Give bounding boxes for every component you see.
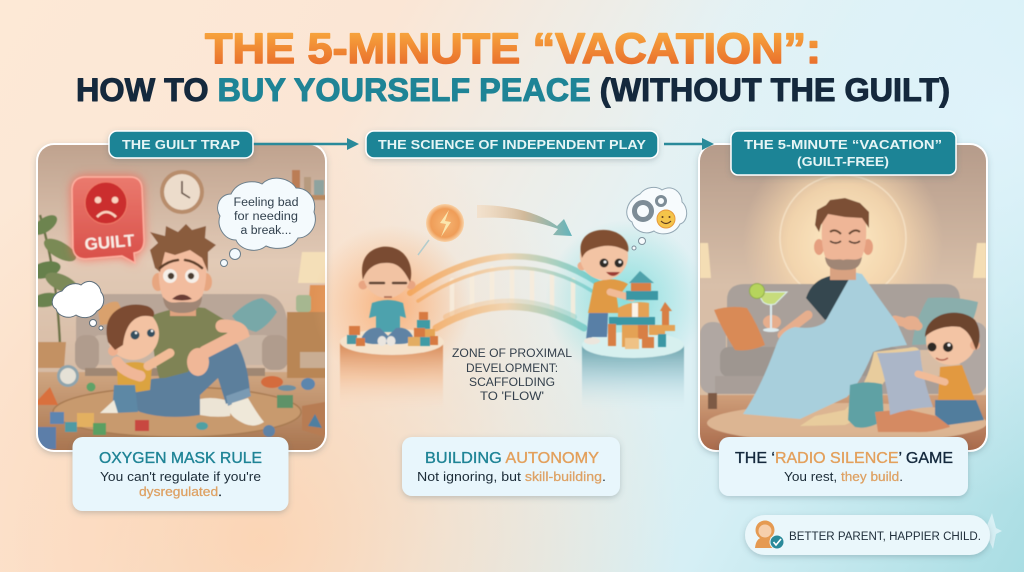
label: the 5-minute vacation — [731, 131, 956, 175]
thought bubble: dad: Feeling bad — [234, 197, 298, 209]
caption: building autonomy: Not ignoring, but skill-building . — [417, 469, 606, 484]
panel: guilt-free vacation — [698, 140, 988, 452]
plant — [38, 214, 76, 368]
zone of proximal development label: DEVELOPMENT: — [466, 363, 558, 375]
calm halo — [754, 176, 933, 284]
rug — [53, 387, 301, 437]
icon: wall clock — [160, 170, 204, 214]
footer badge: BETTER PARENT, HAPPIER CHILD. — [789, 531, 981, 543]
thought bubble: child — [52, 281, 104, 330]
footer badge — [745, 513, 1002, 555]
icon: parent with check — [755, 520, 784, 549]
caption: building autonomy: BUILDING AUTONOMY — [425, 450, 599, 467]
panel: the guilt trap — [27, 143, 327, 452]
caption: oxygen mask rule: You can't regulate if you're — [100, 469, 261, 484]
lamp and side table — [287, 252, 327, 378]
sad child with blocks — [347, 247, 438, 346]
sofa — [700, 284, 987, 409]
caption: building autonomy — [402, 437, 620, 496]
thought bubble: dad — [218, 178, 315, 266]
label: the 5-minute vacation: THE 5-MINUTE “VACATION” — [744, 137, 942, 152]
label: science of independent play: THE SCIENCE OF INDEPENDENT PLAY — [378, 137, 646, 152]
thought bubble: gears and smile — [627, 187, 687, 250]
child hugging dad — [100, 304, 170, 413]
toys scattered — [37, 365, 325, 449]
caption: radio silence game: You rest, they build. — [784, 469, 903, 484]
arrow: guilt trap to science — [252, 138, 359, 150]
child stacking pillows — [918, 313, 984, 425]
caption: oxygen mask rule — [72, 437, 288, 511]
caption: radio silence game: THE ‘RADIO SILENCE’ GAME — [735, 450, 953, 467]
sofa — [75, 294, 288, 376]
pillows — [848, 350, 950, 432]
thought bubble: dad: a break... — [240, 225, 292, 237]
zone of proximal development label: ZONE OF PROXIMAL — [452, 348, 573, 360]
wall lamps — [700, 243, 986, 278]
icon: cocktail glass — [750, 284, 787, 332]
label: the guilt trap — [109, 131, 253, 158]
rug — [706, 402, 986, 437]
title: HOW TO BUY YOURSELF PEACE (WITHOUT THE GUILT) — [76, 72, 950, 108]
caption: oxygen mask rule: OXYGEN MASK RULE — [99, 450, 262, 467]
icon: spark — [418, 204, 464, 255]
dad — [130, 224, 264, 426]
happy child building — [578, 230, 675, 349]
title: THE 5-MINUTE “VACATION”: — [205, 25, 821, 73]
left pedestal — [340, 329, 444, 410]
caption: radio silence game — [719, 437, 968, 496]
shelf top right — [292, 170, 325, 200]
bridge — [410, 256, 598, 328]
glow behind children — [312, 220, 705, 385]
right pedestal — [582, 332, 684, 410]
label: the 5-minute vacation: (GUILT-FREE) — [797, 154, 889, 169]
thought bubble: dad: for needing — [234, 211, 298, 223]
label: science of independent play — [366, 131, 658, 158]
caption: oxygen mask rule: dysregulated . — [139, 484, 222, 499]
arrow: curved progress — [477, 205, 572, 236]
zone of proximal development label — [452, 348, 573, 403]
panel: science of independent play — [312, 187, 705, 410]
title — [76, 25, 950, 108]
guilt badge — [72, 177, 144, 263]
arrow: science to vacation — [664, 138, 714, 150]
zone of proximal development label: TO 'FLOW' — [480, 391, 544, 403]
guilt badge: GUILT — [84, 231, 136, 254]
relaxed dad in blanket — [743, 198, 920, 426]
label: the guilt trap: THE GUILT TRAP — [122, 137, 240, 152]
zone of proximal development label: SCAFFOLDING — [469, 377, 555, 389]
